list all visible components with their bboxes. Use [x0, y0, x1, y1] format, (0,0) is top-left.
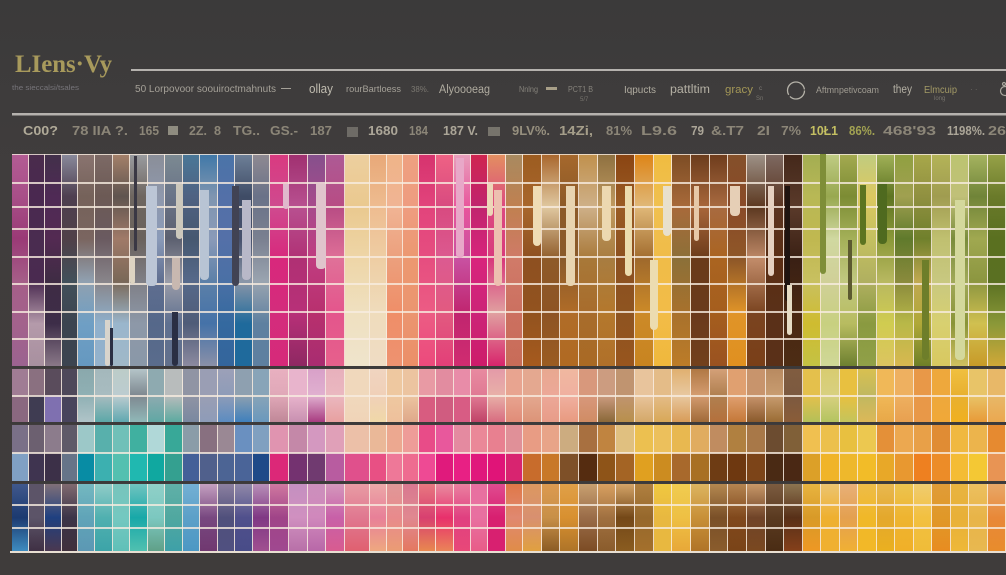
icon: ring	[788, 82, 804, 99]
number row: 468'93	[883, 123, 936, 138]
legend row: Iqpucts	[624, 84, 656, 96]
number row: 184	[409, 123, 429, 138]
swatches: teal	[78, 425, 270, 481]
bottom rule	[10, 551, 1006, 552]
number row: 1680	[368, 123, 398, 138]
panel: second swatch band	[12, 369, 1006, 422]
number row: 10Ł1	[810, 123, 838, 138]
legend row: Elmcuip	[924, 84, 957, 96]
number row: 2Z.	[189, 123, 207, 138]
header: title, legend row and number row	[12, 51, 1006, 138]
number row: 81%	[606, 123, 632, 138]
legend row: Sn	[756, 96, 763, 102]
legend row: c	[759, 86, 762, 92]
number row: 9LV%.	[512, 123, 550, 138]
subtitle: the sieccalsi/tsales	[12, 83, 79, 92]
swatches: pale teal grey	[78, 369, 270, 422]
number row	[23, 123, 1006, 138]
legend row	[135, 82, 978, 103]
legend row: 50 Lorpovoor soouiroctmahnuts	[135, 84, 276, 95]
swatches: peach and cream	[345, 154, 419, 366]
number row: 187 V.	[443, 123, 478, 138]
number row: 1198%.	[947, 123, 985, 138]
legend row: Nnlng	[519, 85, 538, 94]
top rule	[131, 69, 1006, 71]
number row: 86%.	[849, 123, 875, 138]
number row: 79	[691, 123, 704, 138]
grid line: second band	[12, 395, 1006, 396]
swatches: magenta	[270, 154, 345, 366]
swatches: aqua	[78, 484, 270, 551]
swatches: rose	[419, 369, 523, 422]
swatches: bright pink	[419, 425, 523, 481]
swatches: amber and dark brown	[523, 425, 803, 481]
swatches: tan	[523, 369, 803, 422]
swatches: golden yellow	[803, 484, 1006, 551]
legend rule	[12, 113, 1006, 116]
swatches: pink and plum	[270, 425, 345, 481]
swatches: ochre and brown	[523, 484, 803, 551]
legend row: rourBartloess	[346, 84, 402, 94]
grid lines: top band	[12, 154, 1006, 340]
number row: 2I	[757, 123, 770, 138]
swatches: yellow green	[803, 369, 1006, 422]
swatches: olive green	[803, 154, 1006, 366]
legend row: 38%.	[411, 85, 429, 94]
number row: 8	[214, 123, 221, 138]
legend row: ollay	[309, 82, 334, 96]
swatches: slate and aubergine	[12, 425, 78, 481]
legend row: · ·	[970, 85, 978, 94]
number row: GS.-	[270, 123, 298, 138]
swatches: slate blue	[78, 154, 270, 366]
swatches: muted mauve	[12, 369, 78, 422]
number row: L9.6	[641, 123, 677, 138]
swatches: purple	[12, 154, 78, 366]
legend row: Alyoooeag	[439, 84, 490, 96]
panel: bottom swatch band	[12, 484, 1006, 551]
swatches: hot pink	[419, 154, 523, 366]
legend row: Aftmnpetivcoam	[816, 85, 879, 96]
swatches: coral and pink	[419, 484, 523, 551]
swatches: salmon	[345, 484, 419, 551]
number row: 165	[139, 123, 159, 138]
legend row: PCT1 B	[568, 85, 593, 94]
grid lines: bottom band	[12, 504, 1006, 529]
legend row: pattltim	[670, 84, 710, 96]
swatches: pale peach	[345, 369, 419, 422]
swatches: peach and pink	[345, 425, 419, 481]
icon: small glyph right	[1000, 82, 1006, 96]
number row: C00?	[23, 123, 58, 138]
swatches: yellow and orange	[803, 425, 1006, 481]
swatches: brown and amber	[523, 154, 803, 366]
legend row: long	[934, 96, 945, 102]
number row: 7%	[781, 123, 801, 138]
legend row: 5/7	[580, 97, 589, 103]
separator lines	[10, 366, 1006, 368]
title: LIens·Vy	[15, 51, 112, 78]
legend row: they	[893, 84, 912, 96]
swatches: navy and plum	[12, 484, 78, 551]
swatches: light pink	[270, 369, 345, 422]
panel: tall colour swatch band	[12, 154, 1006, 366]
number row: 14Zi,	[559, 123, 593, 138]
swatches: orchid	[270, 484, 345, 551]
number row: &.T7	[711, 123, 744, 138]
number row: 26	[988, 123, 1006, 138]
panel: third swatch band	[12, 425, 1006, 481]
number row: TG..	[233, 123, 260, 138]
number row: 78 IIA ?.	[72, 123, 128, 138]
grid line: third band	[12, 452, 1006, 454]
number row: 187	[310, 123, 332, 138]
legend row: gracy	[725, 84, 754, 96]
